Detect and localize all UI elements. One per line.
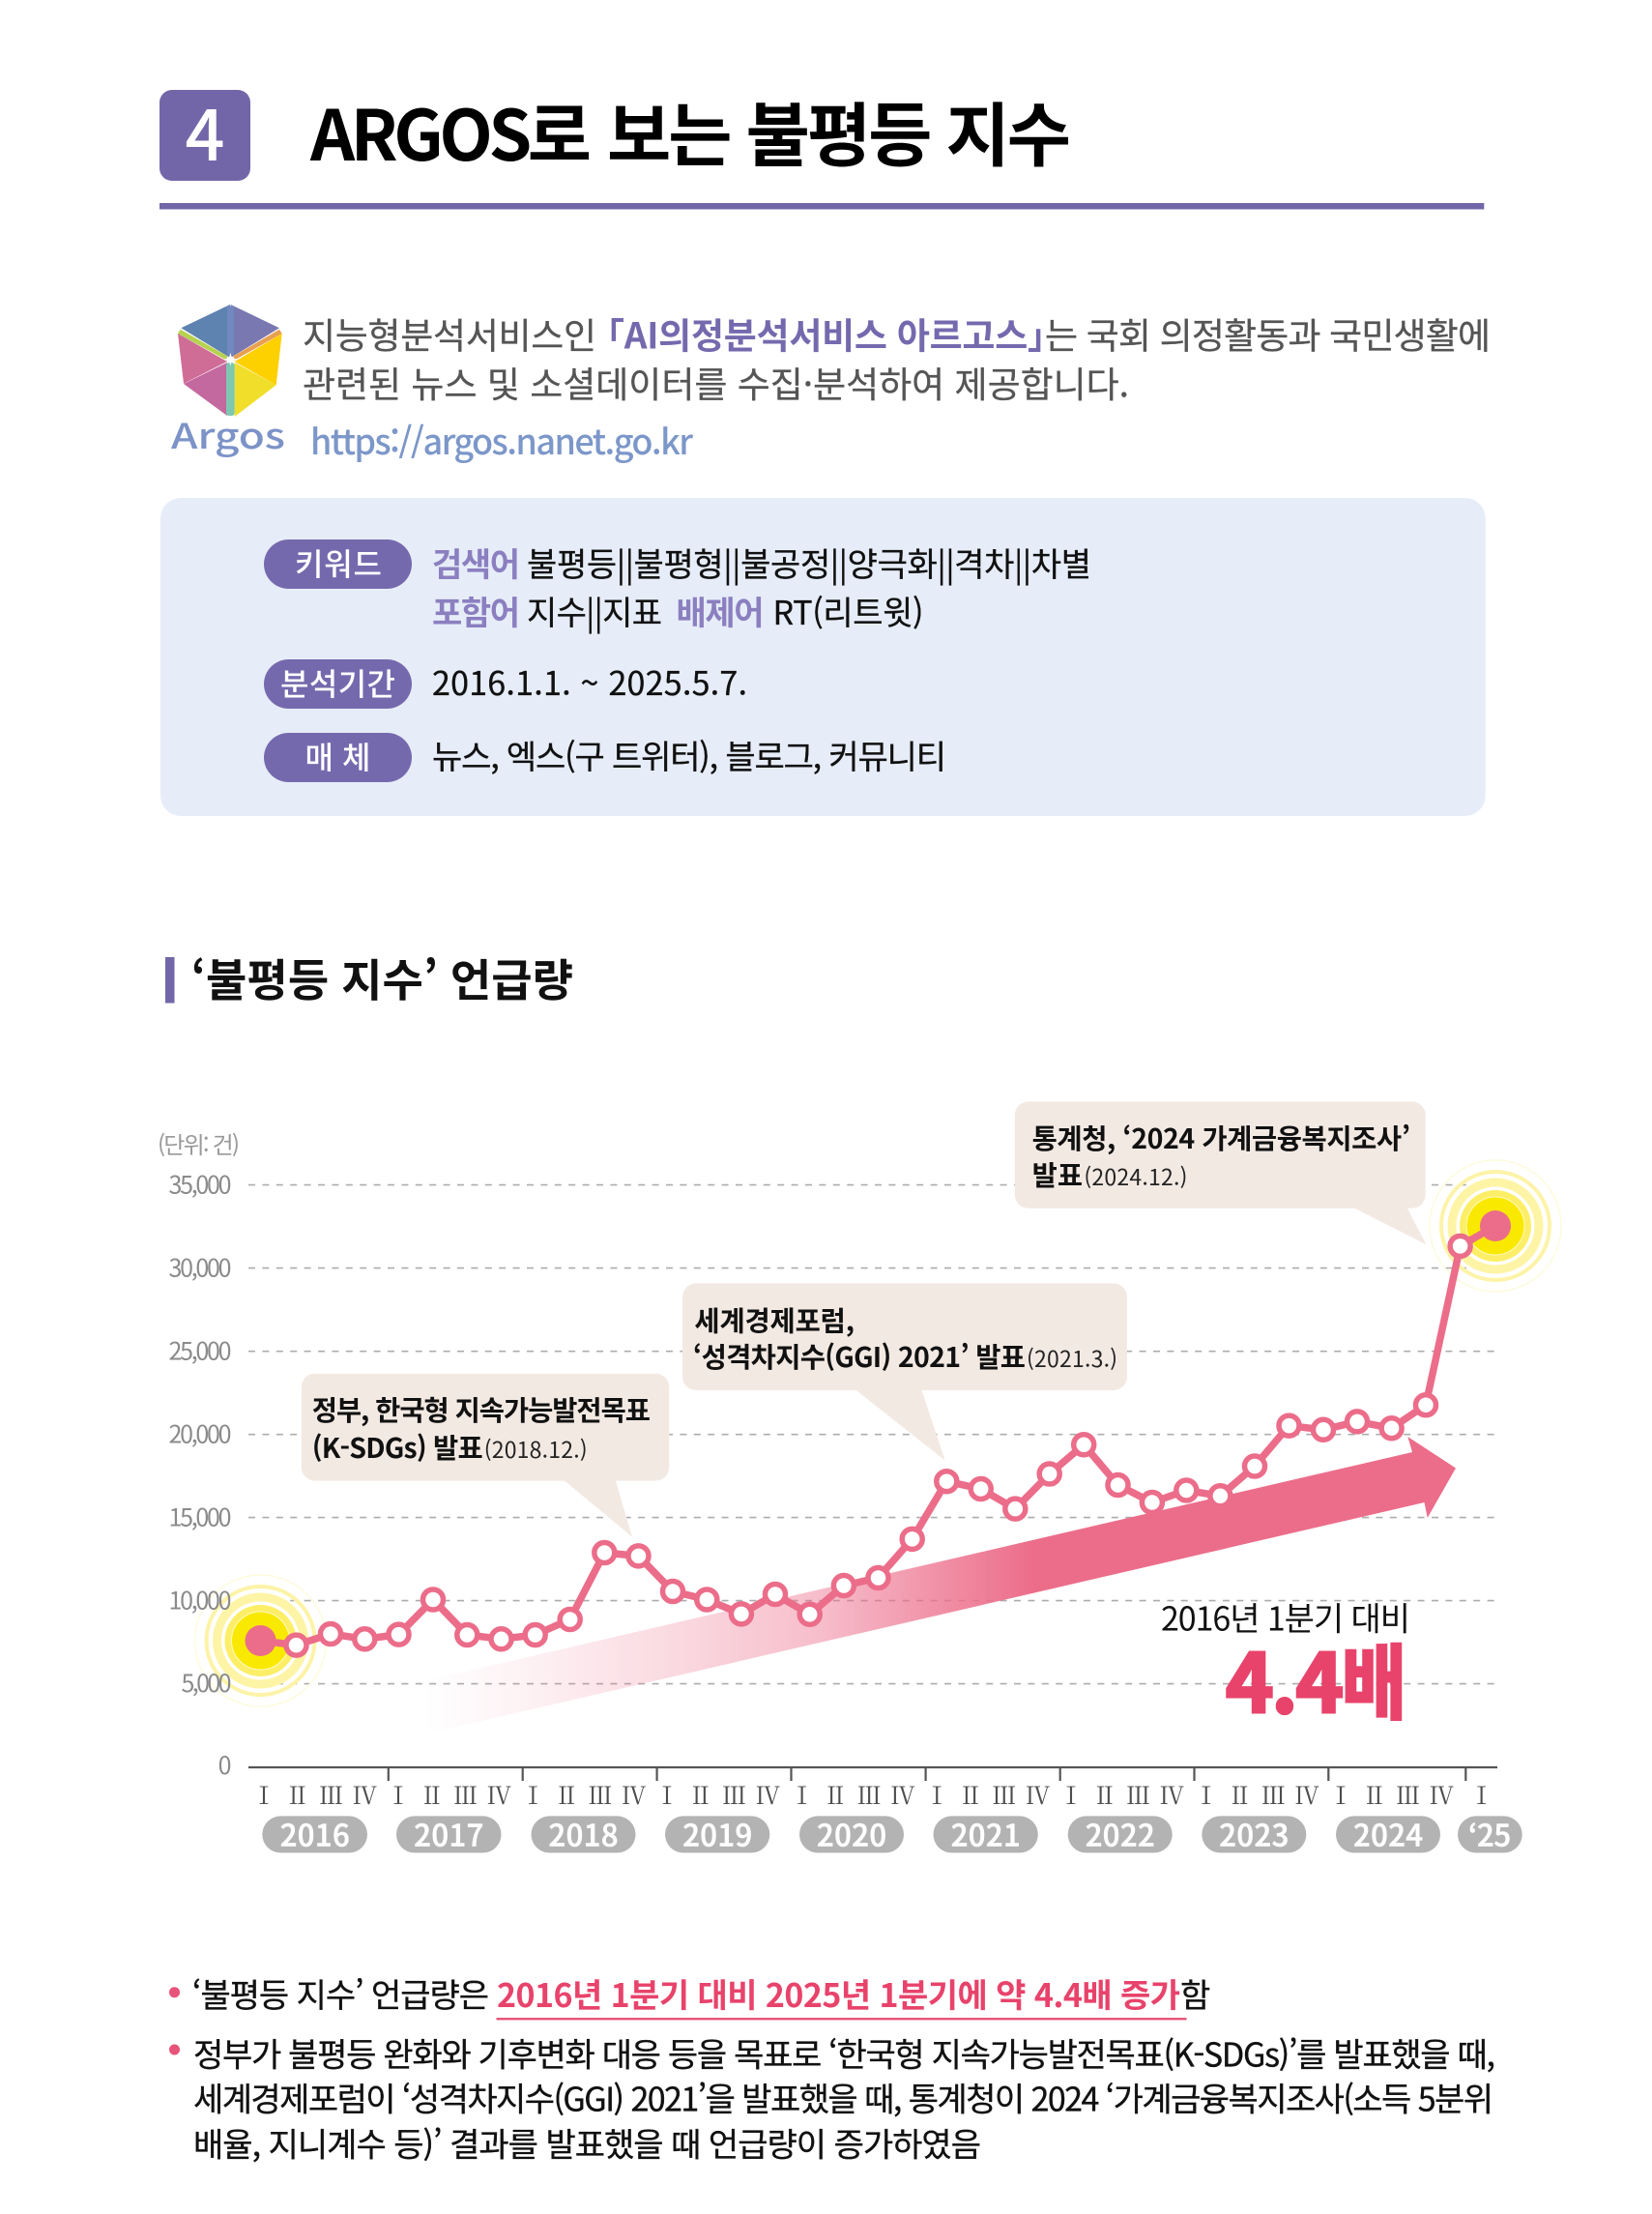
quarter labels: Ⅳ [353,1777,377,1812]
media row: 뉴스, 엑스(구 트위터), 블로그, 커뮤니티 [432,731,946,778]
keyword row [264,539,1091,634]
quarter labels: Ⅲ [722,1777,746,1812]
bullet 1: ‘불평등 지수’ 언급량은 [192,1969,489,2017]
bullet 1: 2016년 1분기 대비 2025년 1분기에 약 4.4배 증가 [497,1969,1180,2017]
quarter labels: Ⅳ [1430,1777,1454,1812]
quarter labels: Ⅱ [1092,1777,1116,1812]
quarter labels: Ⅱ [1362,1777,1386,1812]
panel: search conditions [160,498,1486,816]
quarter labels: Ⅰ [1328,1777,1353,1812]
callout: K-SDGs: (K-SDGs) 발표 [312,1427,483,1467]
keyword row: RT(리트윗) [773,587,924,634]
y axis labels: 30,000 [168,1249,232,1284]
quarter labels: Ⅳ [1295,1777,1319,1812]
quarter labels: Ⅱ [420,1777,444,1812]
year pills: 2022 [1086,1812,1155,1854]
year pills: 2021 [951,1812,1021,1854]
chart heading: ‘불평등 지수’ 언급량 [191,946,573,1009]
callout: GGI 2021 [682,1283,1127,1461]
intro text: https://argos.nanet.go.kr [310,415,693,465]
summary bullets [169,1969,1495,2166]
year pills [262,1812,1522,1854]
quarter labels: Ⅳ [622,1777,646,1812]
media row [264,731,946,782]
bullet 1 [169,1969,1210,2020]
y axis labels: 20,000 [168,1415,232,1450]
quarter labels: Ⅳ [1160,1777,1184,1812]
quarter labels: Ⅱ [824,1777,848,1812]
quarter labels: Ⅱ [958,1777,983,1812]
callout: GGI 2021: (2021.3.) [1027,1341,1117,1374]
x axis [248,1767,1497,1781]
year pills: 2020 [817,1812,886,1854]
quarter labels: Ⅲ [1261,1777,1286,1812]
intro text: 는 국회 의정활동과 국민생활에 [1045,307,1491,360]
quarter labels: Ⅰ [1194,1777,1218,1812]
y axis labels [168,1166,232,1782]
quarter labels: Ⅰ [790,1777,814,1812]
callout: K-SDGs [302,1374,669,1537]
year pills: 2016 [280,1812,350,1854]
quarter labels: Ⅰ [1058,1777,1084,1812]
callout: 4.4 times value: 4.4 [1226,1619,1344,1736]
quarter labels: Ⅲ [588,1777,612,1812]
quarter labels: Ⅲ [992,1777,1016,1812]
header: section number and title [159,79,1484,209]
start and end markers [246,1210,1511,1656]
callout: household finance survey: (2024.12.) [1084,1159,1187,1192]
arrow: upward trend [424,1437,1456,1734]
keyword row: 검색어 [432,539,520,586]
callout: GGI 2021: ‘성격차지수(GGI) 2021’ 발표 [693,1336,1026,1376]
callout: GGI 2021: 세계경제포럼, [694,1300,855,1340]
quarter labels: Ⅳ [487,1777,511,1812]
media row: 매 체 [305,734,371,778]
quarter labels: Ⅲ [1126,1777,1150,1812]
quarter labels: Ⅳ [756,1777,780,1812]
unit label: (단위: 건) [158,1126,240,1160]
year pills: 2019 [682,1812,752,1854]
glow: start point [195,1575,327,1706]
quarter labels: Ⅱ [688,1777,712,1812]
year pills: 2017 [414,1812,483,1854]
quarter labels: Ⅲ [453,1777,478,1812]
y axis labels: 15,000 [168,1499,232,1533]
quarter labels: Ⅲ [319,1777,343,1812]
bullet 2: 배율, 지니계수 등)’ 결과를 발표했을 때 언급량이 증가하였음 [193,2119,981,2166]
icon: Argos logo [171,305,285,459]
quarter labels: Ⅲ [1396,1777,1420,1812]
analysis period row: 2016.1.1. ~ 2025.5.7. [432,657,747,705]
quarter labels: Ⅰ [521,1777,545,1812]
keyword row: 포함어 [432,587,520,634]
bullet 2 [169,2028,1495,2166]
year pills: ‘25 [1468,1812,1511,1854]
quarter labels: Ⅲ [857,1777,882,1812]
quarter labels: Ⅰ [386,1777,411,1812]
title: 보는 불평등 지수 [607,79,1071,181]
callout: K-SDGs: (2018.12.) [484,1432,588,1465]
quarter labels: Ⅳ [1026,1777,1050,1812]
bullet 2: 세계경제포럼이 ‘성격차지수(GGI) 2021’을 발표했을 때, 통계청이 2024 ‘가계금융복지조사(소득 5분위 [193,2073,1493,2121]
callout: 4.4 times value: 배 [1342,1619,1406,1736]
title underline [159,203,1484,209]
number badge: 4 [185,79,225,181]
bullet 1: 함 [1180,1969,1210,2017]
quarter labels [251,1777,1493,1812]
y axis labels: 25,000 [168,1332,232,1367]
y axis labels: 5,000 [182,1665,232,1700]
keyword row: 배제어 [677,587,764,634]
quarter labels: Ⅱ [1228,1777,1252,1812]
quarter labels: Ⅳ [891,1777,915,1812]
analysis period row: 분석기간 [280,660,395,705]
line chart: mentions by quarter [158,1101,1561,1854]
analysis period row [264,657,747,709]
callout: comparison label: 2016년 1분기 대비 [1161,1593,1410,1641]
title [309,79,1071,181]
callout: 4.4 times value [1226,1619,1406,1736]
keyword row: 키워드 [295,540,382,585]
callout: household finance survey: 발표 [1032,1154,1083,1194]
quarter labels: Ⅰ [251,1777,276,1812]
quarter labels: Ⅰ [654,1777,680,1812]
quarter labels: Ⅰ [1469,1777,1493,1812]
callout: household finance survey: 통계청, ‘2024 가계금융복지조사’ [1032,1118,1410,1157]
quarter labels: Ⅰ [925,1777,949,1812]
year pills: 2024 [1353,1812,1423,1854]
y axis labels: 35,000 [168,1166,232,1201]
year pills: 2023 [1219,1812,1289,1854]
quarter labels: Ⅱ [285,1777,309,1812]
year pills: 2018 [549,1812,619,1854]
intro text: 지능형분석서비스인 [303,307,596,360]
callout: household finance survey [1015,1101,1427,1244]
intro text: 「AI의정분석서비스 아르고스」 [589,307,1063,360]
callout: K-SDGs: 정부, 한국형 지속가능발전목표 [312,1389,651,1429]
keyword row: 지수||지표 [527,587,662,634]
keyword row: 불평등||불평형||불공정||양극화||격차||차별 [527,539,1091,586]
glow: end point [1430,1160,1561,1292]
data line [261,1226,1495,1646]
number badge [159,79,250,181]
title: ARGOS로 [309,79,592,181]
bullet 2: 정부가 불평등 완화와 기후변화 대응 등을 목표로 ‘한국형 지속가능발전목표(K-SDGs)’를 발표했을 때, [193,2028,1495,2077]
data markers [286,1236,1470,1655]
y axis labels: 10,000 [168,1582,232,1617]
icon: Argos logo: Argos [171,409,285,459]
quarter labels: Ⅱ [555,1777,579,1812]
intro text: 관련된 뉴스 및 소셜데이터를 수집·분석하여 제공합니다. [303,356,1129,408]
intro text [303,307,1491,465]
y axis labels: 0 [218,1747,232,1782]
